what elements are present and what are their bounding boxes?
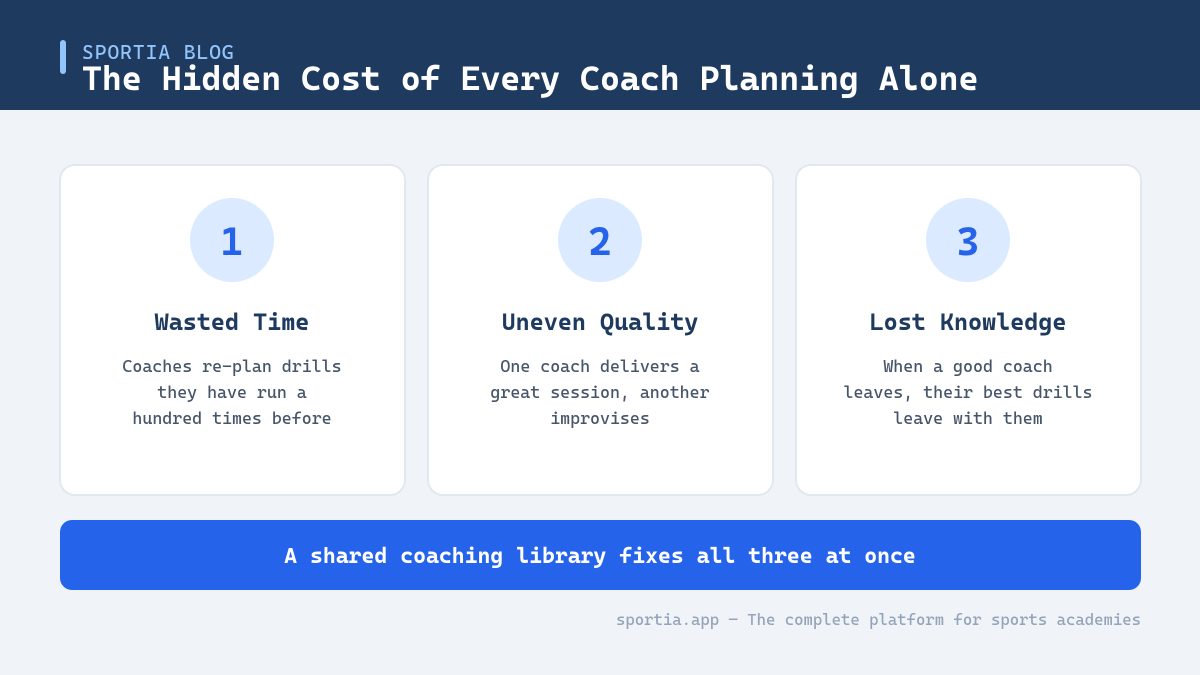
eyebrow: SPORTIA BLOG: SPORTIA BLOG [82,40,235,64]
card text [122,356,342,428]
panel: lost knowledge [795,164,1142,496]
card text: leave with them [893,408,1043,428]
card heading: Uneven Quality [502,308,698,336]
accent bar [60,40,66,74]
panel: uneven quality [427,164,774,496]
number badge 1: 1 [220,219,244,265]
number badge 3 [926,198,1010,282]
card text: One coach delivers a [500,356,700,376]
card text: great session, another [490,382,710,402]
card text: improvises [550,408,650,428]
card text: hundred times before [132,408,332,428]
card text [843,356,1093,428]
number badge 2: 2 [588,219,612,265]
footer text: sportia.app — The complete platform for sports academies [616,610,1141,629]
header band [0,0,1200,110]
card text: they have run a [157,382,307,402]
callout banner: A shared coaching library fixes all three at once [284,544,916,569]
card heading: Wasted Time [155,308,309,336]
number badge 1 [190,198,274,282]
card text: When a good coach [883,356,1053,376]
title: The Hidden Cost of Every Coach Planning Alone [82,58,978,98]
card text: Coaches re-plan drills [122,356,342,376]
card text: leaves, their best drills [843,382,1093,402]
panel: wasted time [59,164,406,496]
callout banner [60,520,1141,590]
card text [490,356,710,428]
card heading: Lost Knowledge [870,308,1066,336]
number badge 3: 3 [956,219,980,265]
number badge 2 [558,198,642,282]
